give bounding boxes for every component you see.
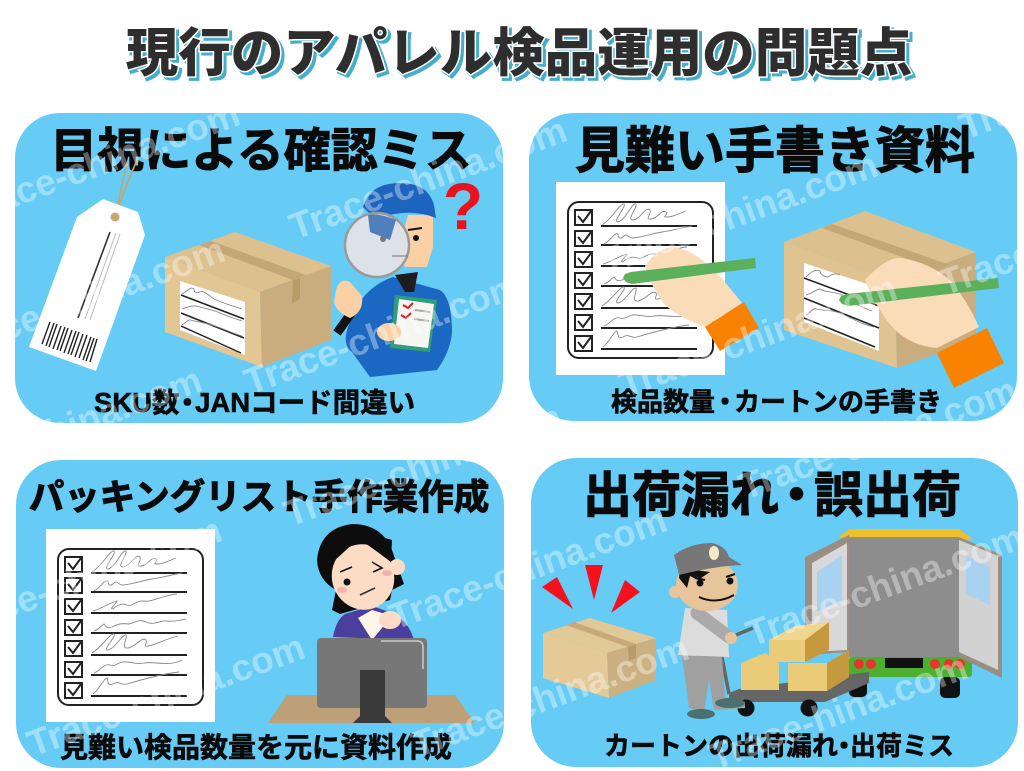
- caption: missed and wrong carton shipments: カートンの出荷漏れ・出荷ミス: [604, 726, 954, 763]
- title: 現行のアパレル検品運用の問題点: [126, 11, 912, 87]
- panel: missed and wrong shipments: [531, 456, 1018, 767]
- watermarks: Trace-china.com: [239, 264, 527, 403]
- heading: manual packing list creation: パッキングリスト手作業作成: [29, 469, 489, 520]
- heading: missed and wrong shipments: 出荷漏れ・誤出荷: [583, 456, 961, 527]
- panel: hard-to-read handwritten documents: [529, 111, 1017, 421]
- icon: cardboard box with label: [165, 232, 331, 367]
- icon: cart with boxes: [719, 622, 869, 716]
- watermarks: Trace-china.com: [595, 144, 883, 283]
- icon: checklist sheet being written on: [556, 182, 759, 375]
- caption: documents from hard-to-read quantities: 見難い検品数量を元に資料作成: [60, 726, 452, 766]
- panel: visual check errors: [15, 112, 503, 423]
- heading: hard-to-read handwritten documents: 見難い手書き資料: [575, 111, 975, 183]
- icon: box with handwritten label: [784, 211, 1004, 388]
- watermarks: Trace-china.com: [284, 109, 572, 248]
- icon: tired woman at desk with monitor: [268, 524, 475, 723]
- icon: missed carton: [543, 618, 656, 698]
- icon: checklist sheet: [46, 529, 215, 722]
- heading: visual check errors: 目視による確認ミス: [50, 112, 472, 181]
- watermarks: Trace-china.com: [741, 516, 1024, 655]
- watermarks: Trace-china.com: [734, 369, 1022, 508]
- watermarks: Trace-china.com: [614, 267, 902, 406]
- icon: delivery truck with open doors: [805, 529, 1002, 698]
- icon: worker with magnifying glass: [334, 183, 452, 377]
- icon: red question mark: ?: [443, 169, 483, 243]
- caption: SKU and JAN code errors: SKU数・JANコード間違い: [94, 387, 415, 418]
- icon: smiling delivery worker: [669, 543, 745, 719]
- panel: manual packing list creation: [16, 460, 504, 768]
- watermarks: Trace-china.com: [279, 396, 567, 535]
- watermarks: Trace-china.com: [384, 499, 672, 638]
- watermarks: Trace-china.com: [22, 626, 310, 765]
- watermarks: Trace-china.com: [406, 627, 694, 766]
- caption: handwritten quantities and cartons: 検品数量・カートンの手書き: [611, 382, 942, 419]
- icon: hang tag with barcode: [29, 160, 145, 371]
- icon: red alert marks: [542, 565, 640, 613]
